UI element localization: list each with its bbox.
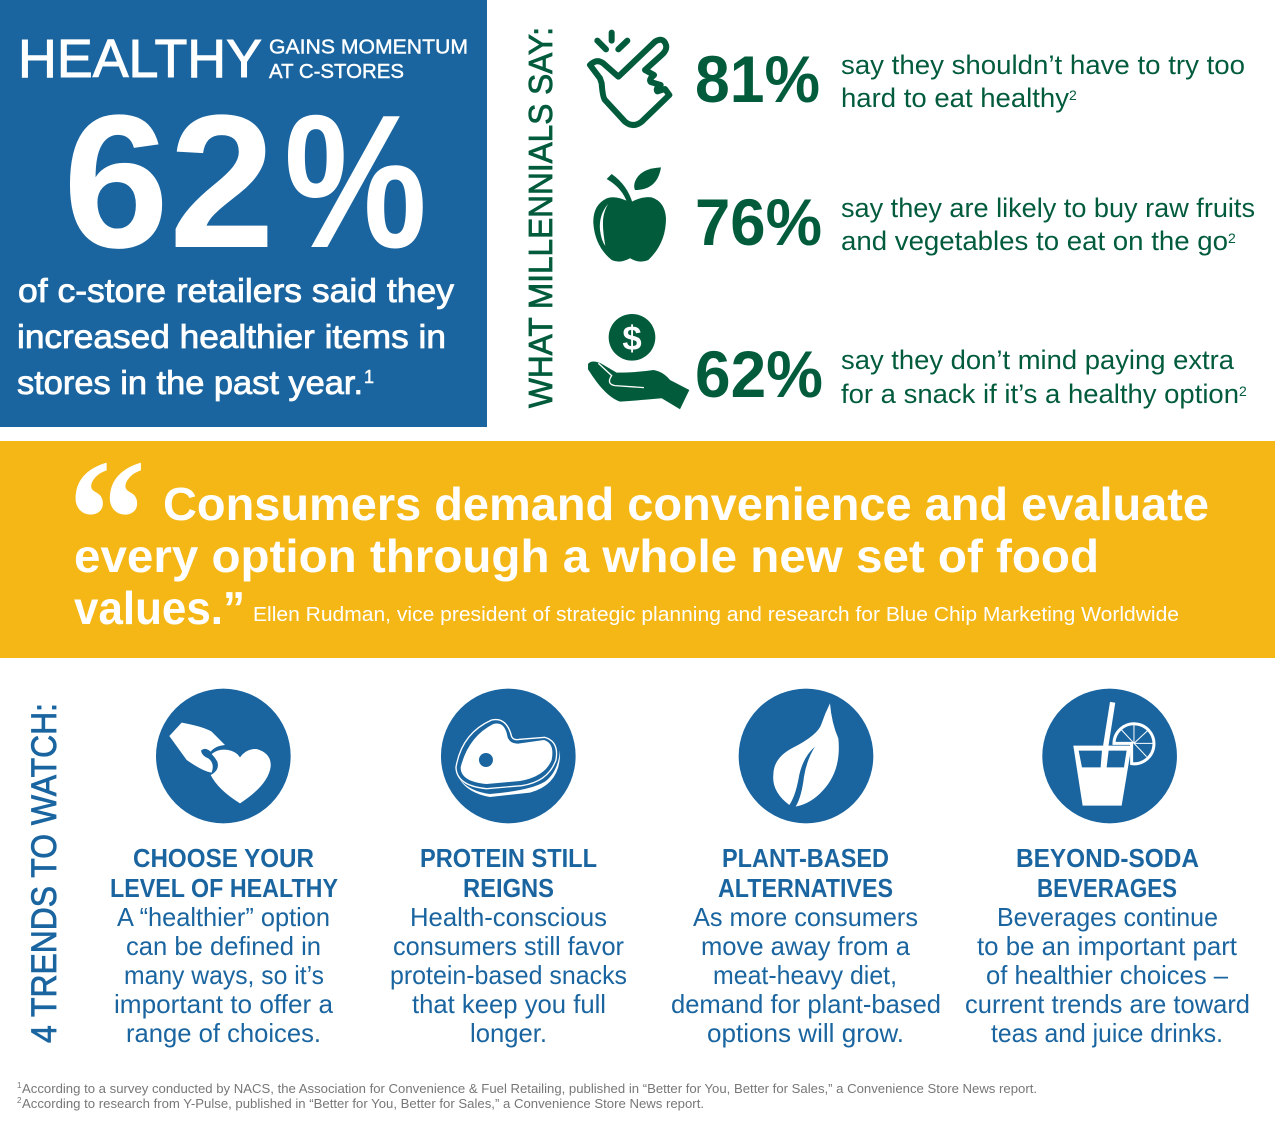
trend heading: PLANT-BASED: [722, 843, 889, 873]
quote text: Consumers demand convenience and evaluate: [163, 478, 1209, 530]
stat row: 81 percent: [590, 33, 1245, 125]
value: 81%: [695, 42, 820, 116]
description: 2: [1239, 383, 1247, 399]
trend description: to be an important part: [977, 931, 1238, 961]
trend description: current trends are toward: [965, 989, 1250, 1019]
trend description: [965, 902, 1250, 1048]
footnotes: According to research from Y-Pulse, published in “Better for You, Better for Sales,” a Convenience Store News report.: [22, 1096, 704, 1111]
icon: hand with coin: $: [622, 320, 642, 358]
trend description: Beverages continue: [997, 902, 1218, 932]
description: 2: [1069, 87, 1077, 103]
text block: 62 percent description: of c-store retailers said they: [18, 272, 455, 309]
description: say they shouldn’t have to try too: [841, 50, 1245, 80]
icon: opening quote mark: “: [68, 425, 146, 615]
trend heading: ALTERNATIVES: [718, 873, 893, 903]
description: say they don’t mind paying extra: [841, 345, 1235, 375]
panel: quote banner: [0, 425, 1275, 658]
title: GAINS MOMENTUM: [269, 36, 468, 58]
value: 76%: [695, 185, 822, 259]
trend description: As more consumers: [693, 902, 918, 932]
heading: what millennials say: WHAT MILLENNIALS SAY:: [522, 27, 559, 408]
description: 2: [1228, 230, 1236, 246]
text block: 62 percent description: [17, 272, 455, 401]
trend description: [114, 902, 334, 1048]
trend heading: CHOOSE YOUR: [133, 843, 314, 873]
description: for a snack if it’s a healthy option: [841, 379, 1239, 409]
attribution: Ellen Rudman, vice president of strategic planning and research for Blue Chip Marketing Worldwide: [253, 604, 1179, 626]
trend description: consumers still favor: [393, 931, 624, 961]
trend: choose your level of healthy: [110, 689, 338, 1048]
trend: plant-based alternatives: [671, 689, 941, 1048]
icon: hand with coin: [588, 314, 689, 409]
footnotes: 2: [17, 1096, 22, 1105]
trend heading: [718, 843, 893, 903]
trend description: [390, 902, 627, 1048]
trend description: [671, 902, 941, 1048]
icon: leaf: [739, 689, 873, 823]
heading: 4 trends to watch: 4 TRENDS TO WATCH:: [25, 703, 64, 1043]
trend: beyond-soda beverages: [965, 689, 1250, 1048]
title: AT C-STORES: [269, 61, 404, 83]
big number: %: [284, 76, 427, 288]
trend heading: REIGNS: [463, 873, 554, 903]
trend description: can be defined in: [126, 931, 321, 961]
trend description: move away from a: [701, 931, 911, 961]
trend description: of healthier choices –: [986, 960, 1229, 990]
big number: 62: [63, 76, 275, 288]
description: hard to eat healthy: [841, 83, 1069, 113]
trend description: meat-heavy diet,: [713, 960, 897, 990]
text block: 62 percent description: stores in the past year.: [17, 364, 363, 401]
text block: 62 percent description: 1: [364, 367, 374, 387]
text block: 62 percent description: increased healthier items in: [17, 318, 446, 355]
description: [841, 50, 1245, 113]
footnotes: [17, 1081, 1037, 1111]
icon: steak: [441, 689, 576, 823]
panel: 62 percent headline: [0, 0, 487, 427]
trend heading: BEYOND-SODA: [1016, 843, 1199, 873]
trend heading: PROTEIN STILL: [420, 843, 597, 873]
trend description: important to offer a: [114, 989, 334, 1019]
description: say they are likely to buy raw fruits: [841, 193, 1255, 223]
trend description: demand for plant-based: [671, 989, 941, 1019]
title: HEALTHY: [18, 29, 262, 89]
description: [841, 193, 1255, 256]
quote text: every option through a whole new set of food: [74, 530, 1099, 582]
trend description: teas and juice drinks.: [991, 1018, 1223, 1048]
trend heading: [1016, 843, 1199, 903]
quote text: [74, 478, 1209, 634]
icon: pointing hand: [590, 33, 669, 125]
stat row: 76 percent: [593, 167, 1255, 262]
trend description: options will grow.: [707, 1018, 904, 1048]
value: 62%: [695, 337, 823, 411]
trend description: that keep you full: [412, 989, 606, 1019]
trend description: range of choices.: [126, 1018, 321, 1048]
trend heading: [420, 843, 597, 903]
trend heading: [110, 843, 338, 903]
trend heading: LEVEL OF HEALTHY: [110, 873, 338, 903]
trend heading: BEVERAGES: [1037, 873, 1177, 903]
trend description: A “healthier” option: [117, 902, 330, 932]
icon: hand and heart: [156, 689, 291, 823]
trend description: protein-based snacks: [390, 960, 627, 990]
trend description: many ways, so it’s: [124, 960, 324, 990]
icon: drink with citrus: [1042, 689, 1177, 823]
description: [841, 345, 1247, 409]
trend description: Health-conscious: [410, 902, 607, 932]
trend: protein still reigns: [390, 689, 627, 1048]
icon: apple: [593, 167, 666, 262]
stat row: 62 percent: [588, 314, 1247, 411]
footnotes: According to a survey conducted by NACS, the Association for Convenience & Fuel Retailing, published in “Better for You, Better for Sales,” a Convenience Store News report.: [22, 1081, 1037, 1096]
trend description: longer.: [470, 1018, 547, 1048]
description: and vegetables to eat on the go: [841, 226, 1228, 256]
quote text: values.”: [74, 582, 245, 634]
title: [18, 29, 468, 89]
footnotes: 1: [17, 1081, 22, 1090]
